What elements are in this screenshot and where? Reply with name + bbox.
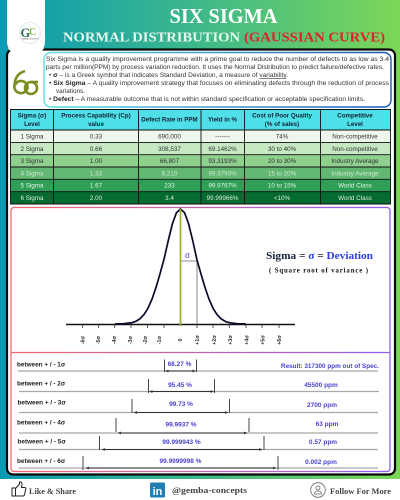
icon: linkedin: in (153, 486, 163, 498)
table header row: Competitive (337, 112, 373, 120)
row 2: 308,537 (158, 146, 181, 153)
intro text box: • σ – is a Greek symbol that indicates Standard Deviation, a measure of variability . (49, 72, 288, 79)
table header row: Sigma (σ) (18, 112, 46, 120)
intro text box: • Defect – A measurable outcome that is not within standard specification or acceptable specification limits. (49, 96, 365, 103)
row: 2 sigma: 95.45 % (168, 382, 192, 389)
logo tab overlap (8, 48, 44, 53)
row: 6 sigma: 99.9999998 % (160, 458, 202, 465)
table header row: Cost of Poor Quality (252, 112, 312, 120)
gemba concepts handle: @gemba-concepts (172, 486, 247, 495)
grid lines (10, 110, 390, 204)
bell curve (115, 209, 246, 324)
tick labels: -6σ (80, 335, 86, 344)
row 6 (20, 195, 372, 202)
tick labels: +2σ (212, 335, 218, 345)
row 5: 233 (164, 183, 175, 190)
row: 4 sigma (17, 418, 378, 433)
row: 1 sigma: Result: 317300 ppm out of Spec. (281, 363, 379, 370)
follow for more: Follow For More (330, 487, 391, 496)
row 4: 15 to 20% (268, 170, 297, 177)
icon: linkedin (150, 482, 165, 498)
row 2: Non-competitive (332, 146, 378, 153)
sigma definition (266, 251, 373, 274)
row 1: Non-competitive (332, 133, 378, 140)
title: NORMAL DISTRIBUTION (63, 30, 240, 46)
row 2 (20, 146, 378, 153)
row: 6 sigma (17, 456, 378, 470)
axis ticks (83, 324, 279, 328)
chart: normal distribution curve (66, 209, 295, 345)
row 3 (20, 158, 379, 165)
row: 3 sigma: between + / - 3σ (18, 400, 66, 406)
tick labels: +6σ (277, 335, 283, 345)
axis (66, 324, 295, 326)
tick labels: -2σ (143, 335, 149, 344)
tick labels: +4σ (244, 335, 250, 345)
row 2: 69.1462% (208, 146, 237, 153)
intro text box: • Six Sigma – A quality improvement strategy that focuses on eliminating defects through the reduction of process (49, 80, 389, 87)
row 5: 99.9767% (208, 183, 237, 190)
intro text box: parts per million(PPM) by process variation reduction. It uses the Normal Distribution to predict failure/defective rates. (46, 64, 384, 71)
row 5: 10 to 15% (268, 183, 297, 190)
table header row: Process Capability (Cp) (61, 112, 131, 120)
row 1: 0.33 (90, 133, 103, 140)
row: 6 sigma: 0.002 ppm (305, 459, 337, 466)
tick labels: +5σ (260, 335, 266, 345)
row 4: 99.3790% (208, 170, 237, 177)
row: 2 sigma: 45500 ppm (304, 382, 338, 389)
table header row (10, 110, 390, 130)
row: 5 sigma: 0.57 ppm (309, 439, 337, 446)
row: 1 sigma: between + / - 1σ (17, 362, 66, 368)
row 3: 93.3193% (208, 158, 237, 165)
row 4: 6,210 (162, 170, 178, 177)
row 3: Industry Average (331, 158, 379, 165)
sigma definition: ( Square root of variance ) (269, 268, 368, 274)
row 5: World Class (338, 183, 372, 190)
tick labels: 0 (178, 338, 184, 342)
row 1: 74% (276, 133, 289, 140)
row: 4 sigma: 63 ppm (316, 421, 339, 428)
intro text box (44, 52, 391, 107)
table header row: (% of sales) (265, 121, 299, 128)
row 5: 1.67 (90, 183, 103, 190)
table header row: value (88, 121, 104, 128)
title: (GAUSSIAN CURVE) (244, 30, 385, 46)
row 1 (20, 133, 378, 140)
row: 5 sigma: 99.999943 % (162, 439, 201, 446)
tick labels: +1σ (195, 335, 201, 345)
title: SIX SIGMA (170, 4, 278, 28)
row: 4 sigma: between + / - 4σ (17, 420, 66, 426)
row 6: 2.00 (90, 195, 103, 202)
tick labels: +3σ (228, 335, 234, 345)
row 3: 1.00 (90, 158, 103, 165)
row backgrounds (10, 130, 390, 142)
title (63, 4, 385, 46)
row 2: 0.66 (90, 146, 103, 153)
table header row: Level (347, 121, 363, 128)
mean line (180, 209, 182, 326)
row 3: 3 Sigma (20, 158, 44, 165)
table header row: Level (24, 121, 40, 128)
logo tab: C (29, 27, 36, 38)
tick labels: -3σ (128, 335, 134, 344)
row 6: 99.99966% (207, 195, 239, 202)
row 4: 4 Sigma (20, 170, 44, 177)
row 2: 30 to 40% (268, 146, 297, 153)
sigma marker lines (180, 261, 197, 324)
table header row: Defect Rate in PPM (141, 116, 198, 124)
panel: lower frame (11, 208, 390, 472)
row 3: 66,807 (160, 158, 180, 165)
row 1: 1 Sigma (20, 133, 44, 140)
row 4 (20, 170, 379, 177)
sigma label: σ (185, 251, 190, 260)
tick labels: -5σ (96, 335, 102, 344)
row 5 (20, 183, 372, 190)
logo tab (7, 0, 45, 53)
row 5: 5 Sigma (20, 183, 44, 190)
row: 3 sigma (18, 399, 378, 413)
tick labels (80, 335, 283, 345)
row 4: Industry Average (331, 170, 379, 177)
table (10, 110, 390, 204)
row 4: 1.33 (90, 170, 103, 177)
icon: person circle (311, 483, 325, 497)
tick labels: -4σ (112, 335, 118, 344)
row: 6 sigma: between + / - 6σ (17, 458, 66, 465)
row 1: 690,000 (158, 133, 181, 140)
row: 3 sigma: 99.73 % (169, 401, 193, 408)
row: 5 sigma (18, 436, 378, 450)
tick labels: -1σ (157, 335, 163, 344)
row 6: <10% (274, 195, 291, 202)
icon: thumbs up (12, 482, 26, 496)
intro text box: variations. (56, 88, 85, 95)
row: 1 sigma (17, 360, 379, 372)
icon: six sigma symbol (14, 71, 38, 94)
logo tab: GEMBA CONCEPTS (22, 38, 39, 40)
like and share: Like & Share (29, 487, 76, 496)
row 1: ------- (215, 133, 230, 140)
row: 5 sigma: between + / - 5σ (18, 438, 66, 446)
row 2: 2 Sigma (20, 146, 44, 153)
row 6: 6 Sigma (20, 195, 44, 202)
intro text box: Six Sigma is a quality improvement programme with a prime goal to reduce the number of defects to as low as 3.4 (46, 56, 390, 63)
row: 2 sigma (17, 379, 379, 393)
row: 4 sigma: 99.9937 % (165, 422, 197, 428)
table header row: Yield in % (208, 116, 237, 124)
row: 2 sigma: between + / - 2σ (17, 380, 66, 388)
row 6: World Class (338, 195, 372, 202)
row: 3 sigma: 2700 ppm (307, 402, 337, 409)
footer bar (0, 479, 400, 500)
logo tab: G (20, 26, 30, 40)
sigma definition: Sigma = σ = Deviation (266, 251, 373, 262)
row 3: 20 to 30% (268, 158, 297, 165)
row 6: 3.4 (165, 195, 174, 202)
row: 1 sigma: 68.27 % (168, 361, 192, 368)
